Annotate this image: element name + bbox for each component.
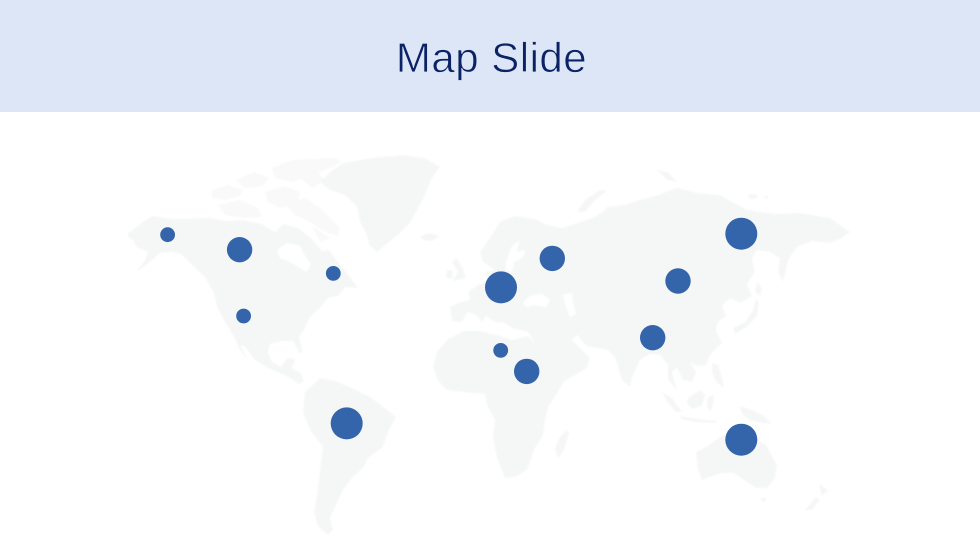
land: borneo — [687, 390, 705, 409]
header band — [0, 0, 980, 112]
marker: western russia — [540, 246, 565, 271]
land: british isles — [446, 258, 466, 281]
land: eurasia — [450, 188, 850, 390]
location markers — [160, 218, 757, 456]
title: Map Slide — [396, 34, 587, 81]
land: svalbard and arctic russia — [657, 170, 677, 182]
marker: alaska — [160, 227, 175, 242]
land: australia — [696, 430, 777, 488]
land: java and lesser sunda — [680, 416, 717, 423]
land: black sea cut-out — [523, 294, 550, 307]
land: arctic islands — [212, 158, 342, 242]
land: sumatra — [662, 392, 682, 412]
land: baltic cut-out — [506, 240, 526, 272]
marker: brazil — [331, 407, 363, 439]
land: caspian sea cut-out — [563, 293, 576, 317]
marker: east africa — [514, 359, 539, 384]
marker: western usa — [236, 309, 251, 323]
land: novaya zemlya — [577, 190, 607, 212]
land: sulawesi — [707, 395, 714, 412]
marker: mongolia — [665, 268, 691, 294]
marker: quebec — [326, 266, 341, 281]
land: new zealand — [805, 484, 828, 510]
land: africa — [433, 331, 567, 478]
land: wrangel — [747, 194, 770, 199]
land: hudson bay cut-out — [277, 243, 311, 272]
land: new guinea — [740, 406, 772, 424]
land: tasmania — [760, 498, 767, 503]
marker: australia — [725, 424, 757, 456]
land masses — [128, 155, 850, 535]
land: greenland — [320, 155, 440, 252]
land: japan — [733, 282, 762, 334]
land: philippines — [712, 363, 724, 388]
marker: western canada — [227, 237, 252, 262]
marker: south asia — [640, 325, 665, 350]
marker: eastern russia — [725, 218, 757, 250]
marker: central europe — [485, 271, 517, 303]
land: north america — [128, 216, 358, 384]
land: iceland — [420, 233, 440, 241]
land: south america — [303, 378, 396, 535]
marker: north africa — [493, 343, 508, 358]
land: madagascar — [555, 430, 569, 458]
